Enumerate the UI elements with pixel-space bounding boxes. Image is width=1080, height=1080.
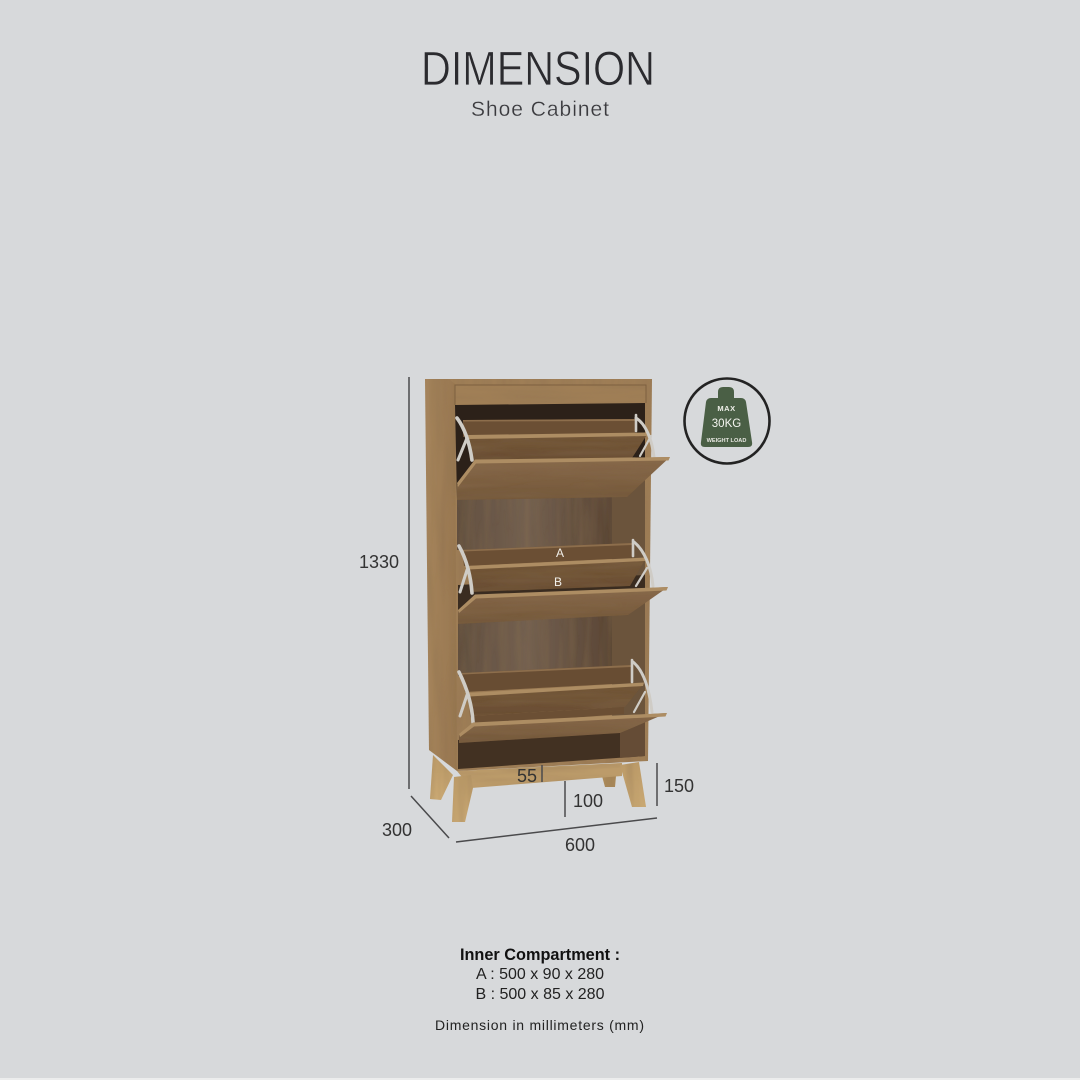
dimension: 100 (565, 781, 603, 817)
middle right inner side (612, 468, 645, 590)
cabinet body frame (425, 379, 652, 771)
bottom cavity (458, 725, 645, 769)
dimension: 55: 55 (517, 766, 537, 786)
front legs (452, 762, 646, 822)
subtitle: Shoe Cabinet (471, 98, 609, 121)
flap 2 (458, 540, 668, 624)
flap 3 lower tray (470, 707, 624, 725)
flap 3 rear tray (462, 665, 631, 692)
dimension: 150 (657, 763, 694, 806)
flap 1 door (457, 457, 670, 500)
dimension: width 600: 600 (565, 835, 595, 855)
back legs (430, 755, 616, 800)
badge text: 30kg: 30KG (712, 418, 741, 430)
dimension: height 1330: 1330 (359, 552, 399, 572)
compartment label B: B (554, 575, 562, 589)
dimension: depth 300 (382, 796, 449, 840)
top strip (455, 385, 646, 405)
inner compartment heading: Inner Compartment : (460, 946, 620, 964)
flap 1 rear tray (463, 419, 635, 437)
shoe cabinet illustration (425, 379, 670, 822)
dimension: 150: 150 (664, 776, 694, 796)
dimension: width 600 (456, 818, 657, 855)
lower back panel (458, 615, 612, 676)
flap 2 hinges (459, 540, 653, 593)
compartment B size: B : 500 x 85 x 280 (476, 986, 605, 1003)
compartment label A: A (556, 546, 564, 560)
flap 3 hinges (459, 660, 652, 722)
bottom cavity right side (620, 722, 645, 758)
middle back panel (457, 497, 612, 550)
flap 1 hinges (457, 415, 654, 460)
top strip outline (455, 385, 646, 405)
badge text: max: MAX (717, 404, 736, 413)
units note: Dimension in millimeters (mm) (435, 1017, 644, 1033)
flap 1 middle tray (468, 433, 648, 461)
flap 2 door (458, 587, 668, 624)
dark top cavity (455, 403, 645, 500)
badge: max weight load (684, 378, 770, 464)
flap 2 rear tray (462, 543, 632, 566)
plinth rail (457, 763, 622, 788)
dimension: depth 300: 300 (382, 820, 412, 840)
flap 3 middle tray (469, 683, 644, 716)
lower right inner side (612, 595, 645, 720)
dimension: 100: 100 (573, 791, 603, 811)
flap 3 (459, 660, 667, 743)
shadow under middle tray (458, 575, 645, 610)
flap 3 door (459, 713, 667, 743)
flap 1 (457, 415, 670, 500)
compartment A size: A : 500 x 90 x 280 (476, 966, 604, 983)
icon: weight (701, 387, 752, 447)
badge text: weight load: WEIGHT LOAD (707, 438, 746, 444)
flap 2 middle tray (468, 558, 646, 592)
title: DIMENSION (421, 43, 655, 96)
